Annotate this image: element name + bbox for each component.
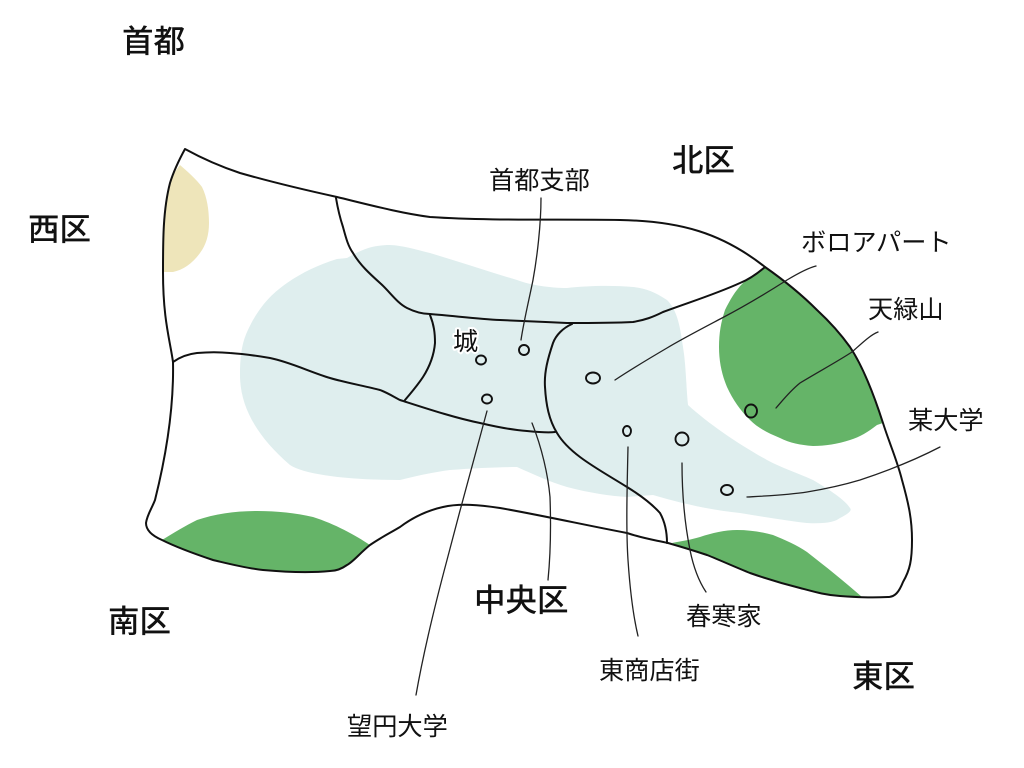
forest: 天緑山 xyxy=(719,267,883,446)
label: 望円大学: 望円大学 xyxy=(347,713,448,741)
central-east boundary xyxy=(545,324,667,543)
castle district west edge xyxy=(405,315,435,400)
label: 城: 城 xyxy=(453,328,478,356)
label: 西区: 西区 xyxy=(28,211,91,247)
label: 某大学: 某大学 xyxy=(908,407,984,435)
label: 東区: 東区 xyxy=(852,658,915,694)
west-south boundary xyxy=(173,352,555,432)
label: 北区: 北区 xyxy=(672,142,735,178)
label: 天緑山: 天緑山 xyxy=(868,296,944,324)
forest: east xyxy=(672,530,862,597)
label: 首都支部: 首都支部 xyxy=(489,167,590,195)
label: ボロアパート: ボロアパート xyxy=(801,229,952,257)
leader lines xyxy=(416,198,940,695)
label: 南区: 南区 xyxy=(108,603,171,639)
urban area xyxy=(240,245,851,523)
place markers xyxy=(476,345,757,495)
outer outline xyxy=(146,149,912,597)
north-central boundary xyxy=(336,198,765,323)
map area fills xyxy=(162,165,883,597)
label: 春寒家: 春寒家 xyxy=(686,603,762,631)
district boundaries xyxy=(146,149,912,597)
sand area xyxy=(163,165,209,272)
label: 中央区: 中央区 xyxy=(474,582,569,618)
label: 東商店街: 東商店街 xyxy=(599,657,700,685)
forest: south xyxy=(162,511,370,572)
title: 首都 xyxy=(122,23,185,59)
